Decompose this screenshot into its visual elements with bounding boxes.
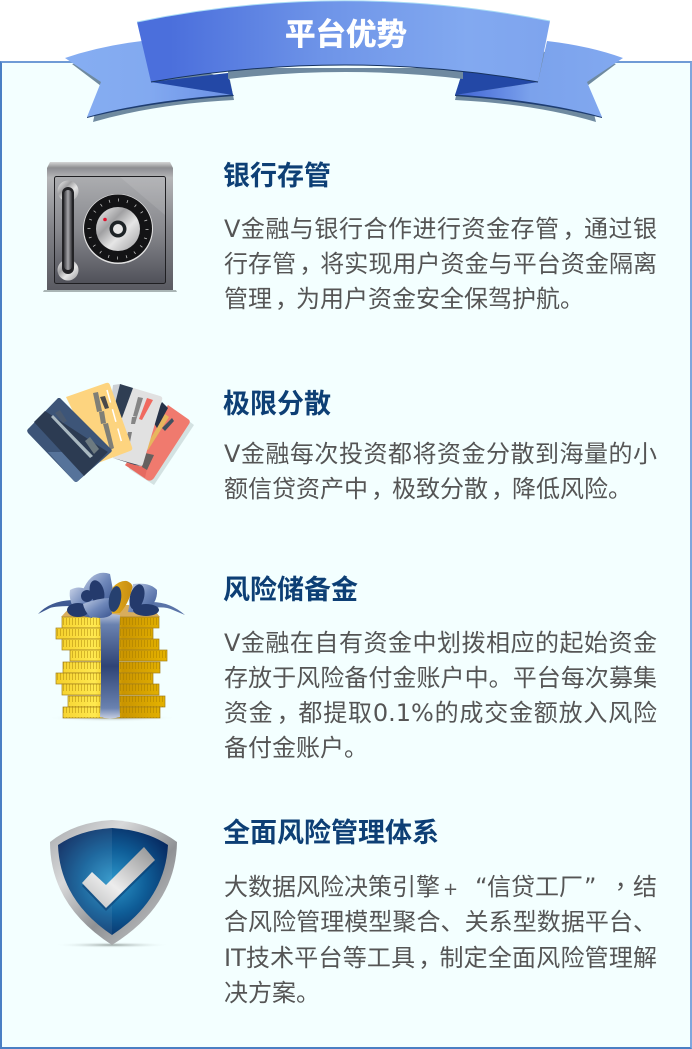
red card xyxy=(129,408,194,485)
text: risk reserve xyxy=(224,629,657,762)
heading: risk management system: 全面风险管理体系 xyxy=(223,818,439,848)
icon: gift-wrapped coin stack xyxy=(38,572,185,720)
icon: safe xyxy=(43,162,177,292)
text: risk reserve: 备付金账户。 xyxy=(224,734,368,762)
yellow card xyxy=(66,383,132,463)
text: risk management system: IT技术平台等工具，制定全面风险管理解 xyxy=(224,938,657,973)
left ribbon tail xyxy=(65,41,234,122)
text: bank custody: V金融与银行合作进行资金存管，通过银 xyxy=(224,209,657,244)
heading: diversification: 极限分散 xyxy=(223,389,331,419)
section: risk reserve xyxy=(223,575,657,762)
text: risk management system: ” ， xyxy=(584,867,632,902)
text: bank custody: 管理，为用户资金安全保驾护航。 xyxy=(224,279,584,314)
text: diversification: 额信贷资产中，极致分散，降低风险。 xyxy=(224,469,632,504)
text: risk management system: 大数据风险决策引擎 信贷工厂 结 xyxy=(224,873,657,901)
text: diversification xyxy=(224,440,657,504)
right ribbon tail xyxy=(455,41,623,122)
text: risk reserve: V金融在自有资金中划拨相应的起始资金 xyxy=(224,629,657,657)
text: risk management system xyxy=(224,867,657,1007)
grey card sliver xyxy=(108,384,120,430)
banner ribbon xyxy=(65,0,623,122)
section: diversification xyxy=(223,389,657,504)
text: risk management system: 决方案。 xyxy=(224,979,320,1007)
text: risk management system: 合风险管理模型聚合、关系型数据平台、 xyxy=(224,908,657,936)
ribbon centre band xyxy=(137,1,550,82)
blue card xyxy=(27,398,112,482)
heading: risk reserve: 风险储备金 xyxy=(223,575,358,605)
section: risk management system xyxy=(223,818,657,1007)
icon: shield with check mark xyxy=(50,820,177,947)
dark card sliver xyxy=(152,402,168,428)
banner title: 平台优势 xyxy=(285,17,407,52)
icon: fanned bank cards xyxy=(27,382,194,485)
heading: bank custody: 银行存管 xyxy=(223,161,331,191)
text: bank custody xyxy=(224,209,657,314)
text: risk reserve: 存放于风险备付金账户中。平台每次募集 xyxy=(224,664,657,692)
text: risk reserve: 资金，都提取0.1%的成交金额放入风险 xyxy=(224,693,657,728)
text: risk management system: + “ xyxy=(443,873,488,901)
text: bank custody: 行存管，将实现用户资金与平台资金隔离 xyxy=(224,244,657,279)
text: diversification: V金融每次投资都将资金分散到海量的小 xyxy=(224,440,657,468)
white card xyxy=(113,384,162,466)
section: bank custody xyxy=(223,161,657,314)
